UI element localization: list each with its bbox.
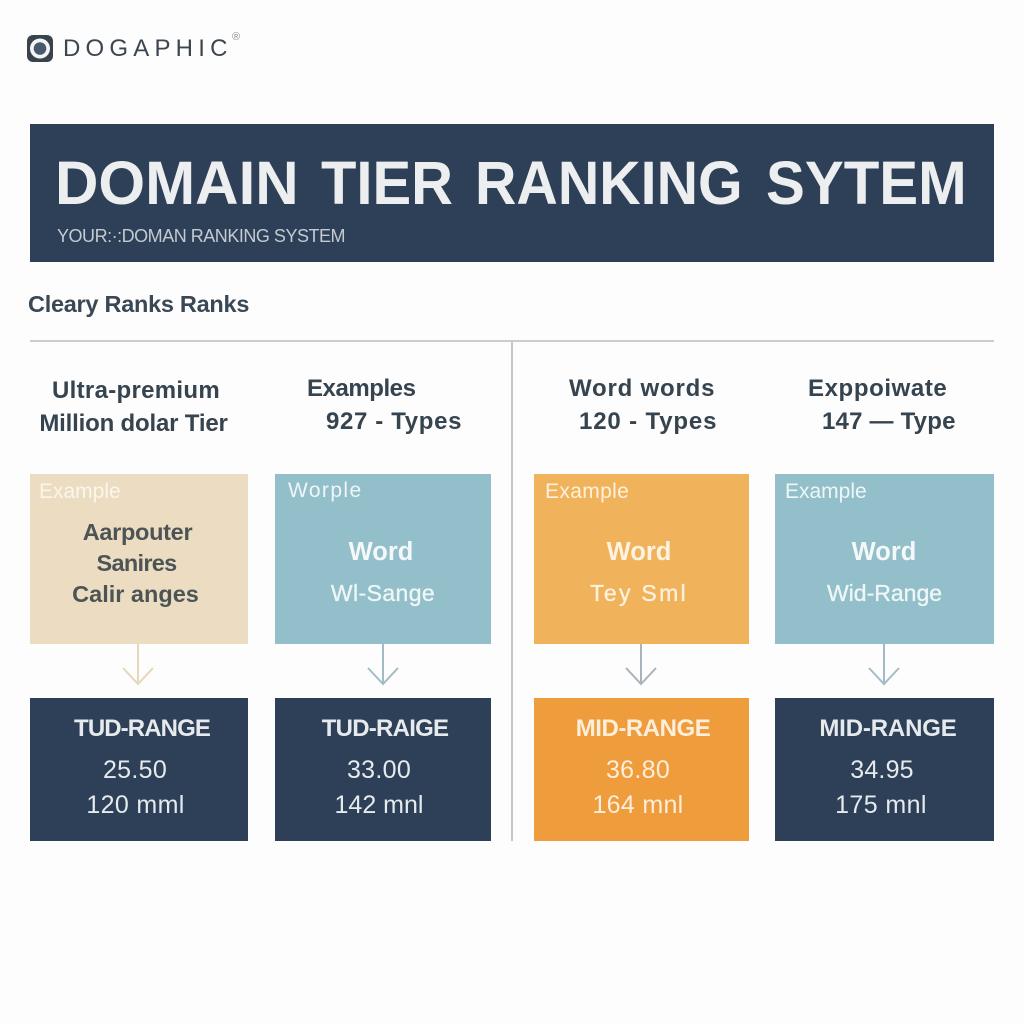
result 4 tier: MID-RANGE <box>819 715 957 742</box>
column 1 heading: Ultra-premium <box>52 377 220 404</box>
column 1 heading <box>39 377 228 437</box>
result 1 volume: 120 mml <box>86 791 185 819</box>
result 1 tier: TUD-RANGE <box>74 715 210 742</box>
column 1 heading: Million dolar Tier <box>39 410 228 437</box>
title: DOMAIN <box>55 149 299 217</box>
card 1 text: Aarpouter <box>83 519 192 545</box>
arrow 2 <box>367 644 399 686</box>
title banner <box>30 124 994 262</box>
column 4 heading: Exppoiwate <box>808 375 947 402</box>
panel: result 3 <box>534 698 749 841</box>
arrow 3 <box>625 644 657 686</box>
card 4 text: Wid-Range <box>827 580 942 606</box>
column 2 heading <box>307 375 462 435</box>
column 3 heading <box>569 375 717 435</box>
registered mark: ® <box>232 31 240 43</box>
column 4 heading: 147 — Type <box>822 408 956 435</box>
logo wordmark: DOGAPHIC <box>63 35 233 62</box>
title: TIER <box>321 149 453 217</box>
logo <box>27 31 240 62</box>
column 2 heading: Examples <box>307 375 415 402</box>
result 1 value: 25.50 <box>103 756 167 784</box>
panel: result 1 <box>30 698 248 841</box>
card 4 label: Example <box>785 480 867 503</box>
card 3 word: Word <box>607 538 671 566</box>
card 2 text: Wl-Sange <box>331 580 435 606</box>
section heading: Cleary Ranks Ranks <box>28 291 249 317</box>
card 1 text: Sanires <box>96 550 177 576</box>
result 4 value: 34.95 <box>850 756 914 784</box>
card 4 word: Word <box>852 538 916 566</box>
card 2 label: Worple <box>288 479 363 502</box>
panel: result 2 <box>275 698 491 841</box>
panel: card 1 beige <box>30 474 248 644</box>
column 4 heading <box>808 375 956 435</box>
result 2 value: 33.00 <box>347 756 411 784</box>
title <box>55 149 966 217</box>
vertical divider <box>511 341 513 841</box>
column 3 heading: Word words <box>569 375 715 402</box>
panel: card 4 blue <box>775 474 994 644</box>
card 1 text <box>72 519 199 607</box>
result 3 tier: MID-RANGE <box>576 715 710 742</box>
result 2 tier: TUD-RAIGE <box>322 715 448 742</box>
result 3 volume: 164 mnl <box>592 791 684 819</box>
panel: card 2 blue <box>275 474 491 644</box>
card 3 text: Tey Sml <box>590 580 688 606</box>
panel: card 3 orange <box>534 474 749 644</box>
subtitle: YOUR:·:DOMAN RANKING SYSTEM <box>57 226 345 246</box>
icon: logo mark <box>27 35 53 62</box>
result 2 volume: 142 mnl <box>335 791 423 819</box>
card 1 label: Example <box>39 480 121 503</box>
column 2 heading: 927 - Types <box>326 408 462 435</box>
title: SYTEM <box>766 149 966 217</box>
arrow 4 <box>868 644 900 686</box>
horizontal divider <box>30 340 994 342</box>
card 1 text: Calir anges <box>72 581 199 607</box>
result 4 volume: 175 mnl <box>835 791 927 819</box>
title: RANKING <box>475 149 743 217</box>
arrow 1 <box>122 644 154 686</box>
card 3 label: Example <box>545 480 629 503</box>
card 2 word: Word <box>349 538 413 566</box>
panel: result 4 <box>775 698 994 841</box>
result 3 value: 36.80 <box>606 756 670 784</box>
column 3 heading: 120 - Types <box>579 408 717 435</box>
